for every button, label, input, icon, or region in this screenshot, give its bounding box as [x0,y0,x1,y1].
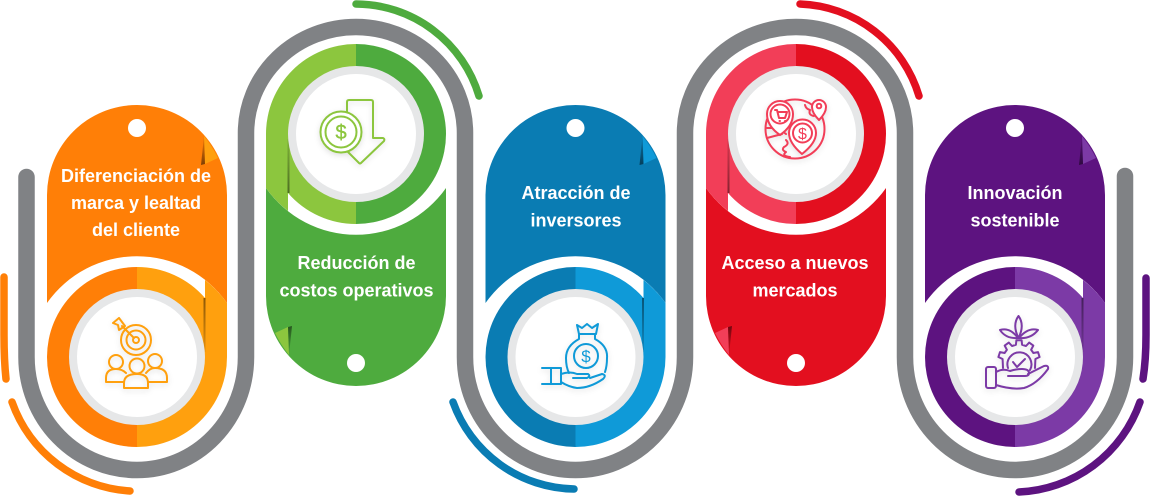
heading: blue: Atracción de [521,183,631,203]
icon: target and people [106,318,167,388]
accent arc: green [356,4,479,96]
heading: orange: Diferenciación de [61,166,211,186]
accent arcs: orange [4,277,130,491]
accent arcs: purple [1019,278,1146,492]
panel: purple tag [925,105,1105,447]
heading: purple: Innovación [967,183,1063,203]
heading: orange: del cliente [92,220,180,240]
heading: orange: marca y lealtad [71,193,201,213]
panel: orange tag [47,105,227,447]
heading: red: Acceso a nuevos [721,253,869,273]
heading: green: costos operativos [279,280,434,300]
heading: green: Reducción de [297,253,416,273]
icon: plant, gear and hand [986,316,1048,389]
panel: red tag [706,44,886,386]
icon: coin and down arrow [320,100,384,164]
panel: green tag [266,44,446,386]
panel: blue tag [486,105,666,447]
icon: globe with pins: $ [798,126,807,143]
heading: red: mercados [752,280,838,300]
icon: money bag on hand [542,324,607,388]
heading: purple: sostenible [970,210,1060,230]
accent arc: red [800,4,919,96]
icon: globe with pins [766,100,826,158]
icon: money bag on hand: $ [581,347,591,366]
accent arc: blue [453,402,574,489]
heading: blue: inversores [530,210,622,230]
icon: coin and down arrow: $ [335,122,347,144]
